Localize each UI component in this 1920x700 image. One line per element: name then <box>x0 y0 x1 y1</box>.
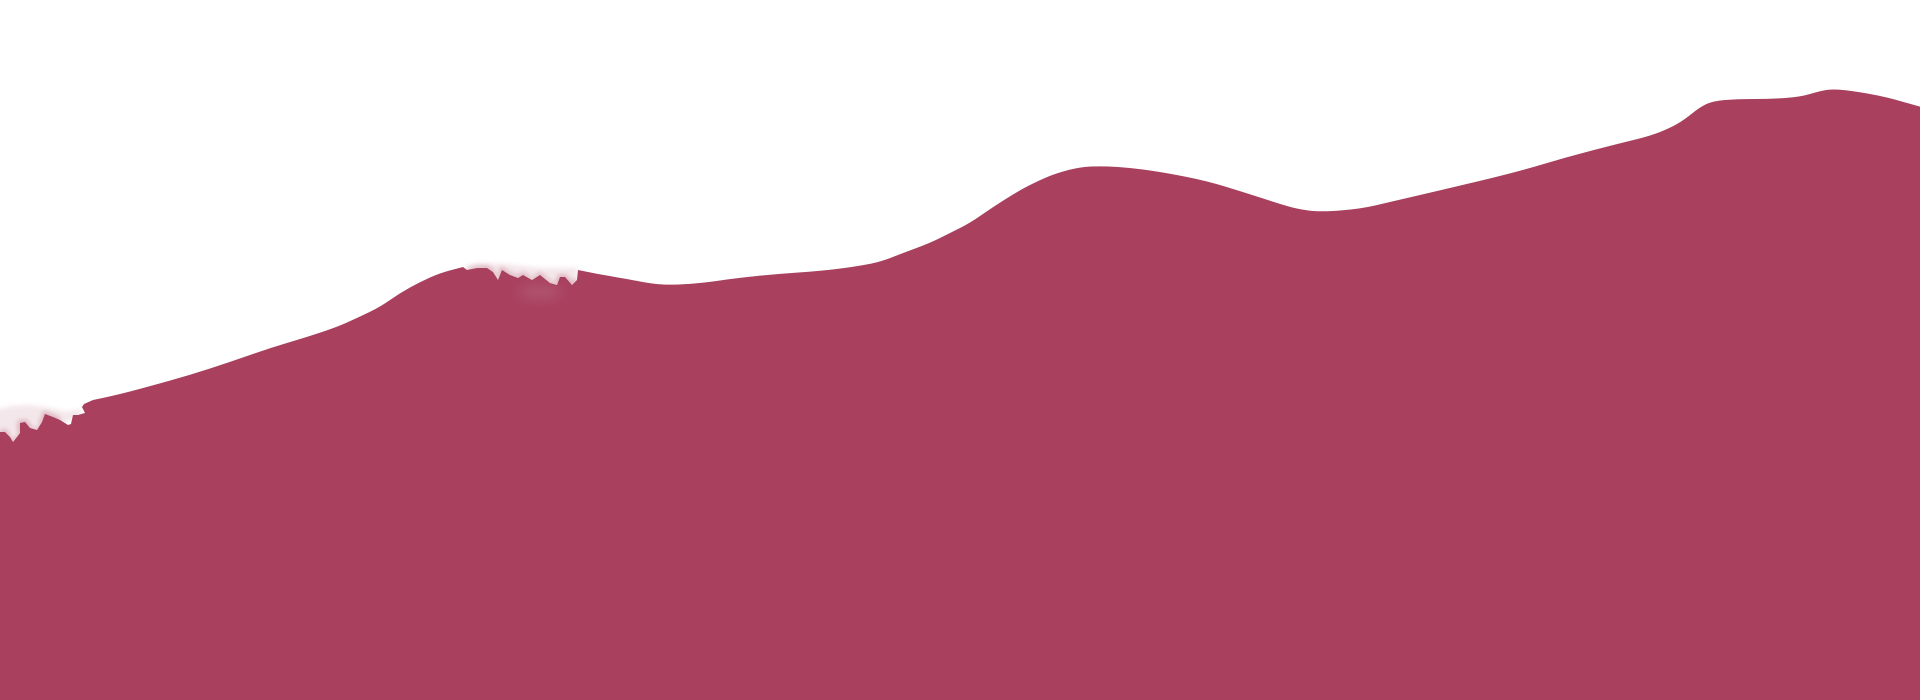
brush highlight inside ridge <box>518 284 562 300</box>
brush haze: ridge edge <box>463 263 578 285</box>
brush haze: left edge <box>0 405 82 442</box>
